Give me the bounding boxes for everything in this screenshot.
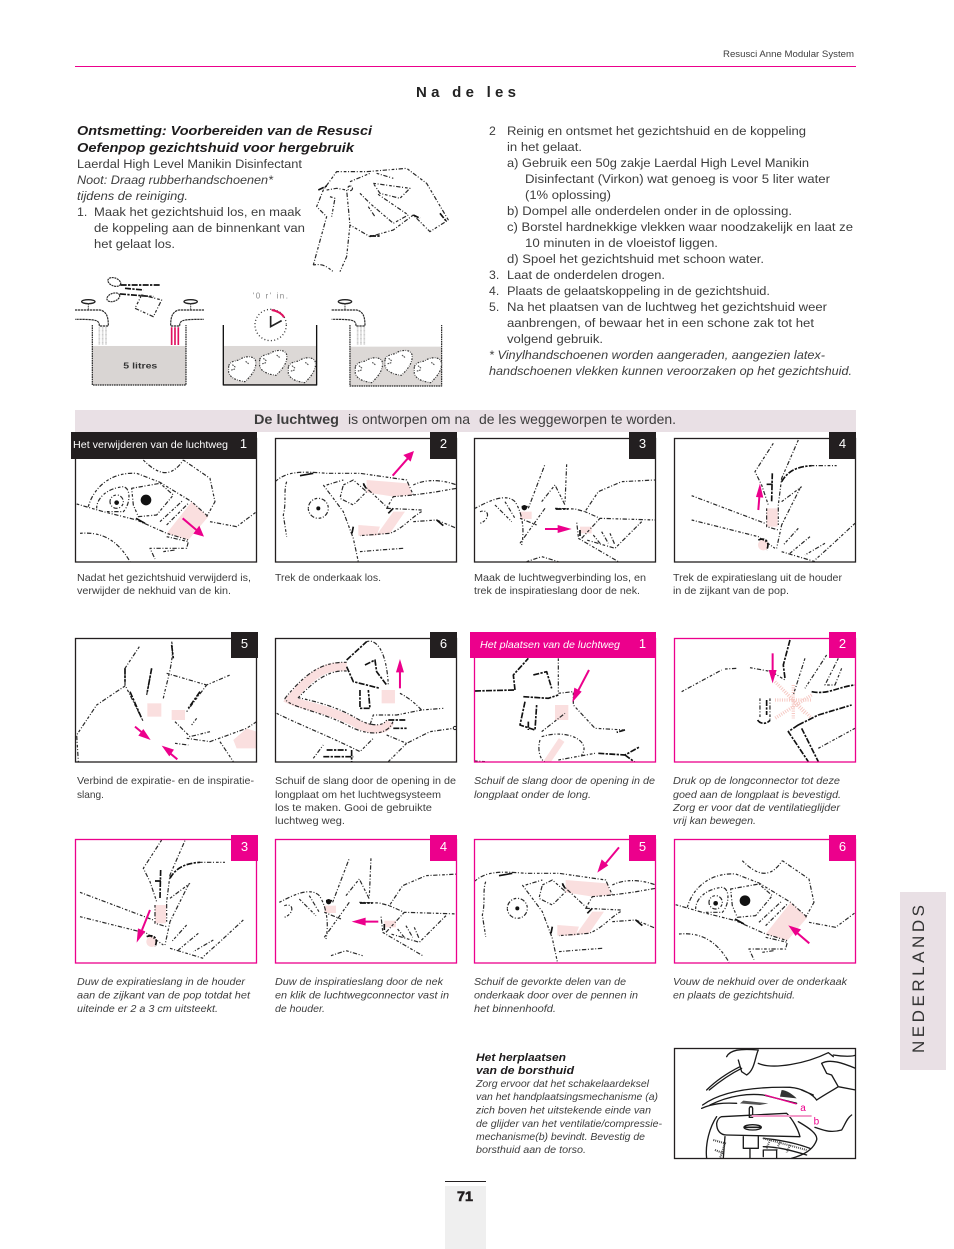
panel: placement step 6	[673, 835, 856, 1002]
text block: disinfection left column: Noot: Draag rubberhandschoenen*	[77, 173, 274, 187]
panel: removal step 5: slang.	[77, 790, 104, 801]
page number tab	[445, 1181, 486, 1249]
panel: placement step 6: 6	[839, 839, 846, 854]
panel: removal step 1: Nadat het gezichtshuid verwijderd is,	[77, 573, 251, 584]
text block: disinfection left column: 1.	[77, 205, 87, 219]
panel: removal step 2: 2	[440, 436, 447, 451]
text block: disinfection right column: 5.	[489, 300, 499, 314]
panel: placement step 5: het binnenhoofd.	[474, 1004, 556, 1015]
panel: removal step 4	[673, 432, 856, 597]
panel: placement step 6: en plaats de gezichtshuid.	[673, 990, 795, 1002]
illustration: chest skin mechanism	[674, 1048, 856, 1158]
illustration: basin with 5 litres: 5 litres	[123, 360, 158, 370]
panel: placement step 3: uiteinde er 2 a 3 cm uitsteekt.	[77, 1004, 218, 1015]
side tab: NEDERLANDS: NEDERLANDS	[909, 905, 928, 1053]
text block: disinfection right column: 2	[489, 124, 496, 138]
text block: replacing the chest skin: van het handplaatsingsmechanisme (a)	[476, 1092, 658, 1103]
text block: disinfection right column	[489, 124, 853, 378]
panel: placement step 1: longplaat onder de long.	[474, 790, 591, 801]
text block: disinfection right column: (1% oplossing)	[525, 188, 611, 202]
icon: hands holding face skin	[313, 168, 448, 272]
text block: replacing the chest skin: borsthuid aan de torso.	[476, 1145, 586, 1156]
panel: removal step 6: Schuif de slang door de opening in de	[275, 776, 456, 787]
illustration: chest skin mechanism: b	[814, 1117, 820, 1128]
text block: disinfection right column: * Vinylhandschoenen worden aangeraden, aangezien latex-	[489, 348, 825, 362]
section band: De luchtweg: de les weggeworpen te worden.	[479, 411, 676, 427]
panel: placement step 2: Druk op de longconnector tot deze	[673, 776, 840, 787]
text block: disinfection right column: aanbrengen, of bewaar het in een schone zak tot het	[507, 316, 815, 330]
text block: disinfection right column: handschoenen vlekken kunnen veroorzaken op het gezichtshuid.	[489, 364, 852, 378]
text block: replacing the chest skin: van de borsthuid	[476, 1065, 574, 1077]
text block: replacing the chest skin: mechanisme(b) bevindt. Bevestig de	[476, 1132, 645, 1143]
panel: removal step 1: 1	[240, 436, 247, 451]
panel: removal step 1: Het verwijderen van de luchtweg	[73, 440, 228, 451]
panel: removal step 6: los te maken. Gooi de gebruikte	[275, 803, 432, 814]
title: Na de les	[416, 84, 516, 101]
text block: disinfection left column: het gelaat los.	[94, 237, 175, 251]
text block: disinfection left column: Oefenpop gezichtshuid voor hergebruik	[77, 140, 355, 155]
panel: removal step 3	[474, 432, 656, 597]
panel: removal step 1	[71, 432, 257, 597]
panel: placement step 5: Schuif de gevorkte delen van de	[474, 977, 626, 988]
panel: placement step 5: 5	[639, 839, 646, 854]
panel: placement step 2: vrij kan bewegen.	[673, 816, 756, 827]
panel: placement step 1	[470, 632, 656, 801]
panel: placement step 6: Vouw de nekhuid over de onderkaak	[673, 977, 848, 988]
panel: placement step 5: onderkaak door over de pennen in	[474, 990, 638, 1002]
panel: placement step 4: de houder.	[275, 1004, 325, 1015]
text block: disinfection right column: a) Gebruik een 50g zakje Laerdal High Level Manikin	[507, 156, 809, 170]
text block: disinfection right column: Plaats de gelaatskoppeling in de gezichtshuid.	[507, 284, 770, 298]
text block: disinfection right column: volgend gebruik.	[507, 332, 603, 346]
panel: removal step 5	[76, 632, 258, 801]
panel: removal step 5: 5	[241, 636, 248, 651]
panel: placement step 4: 4	[440, 839, 447, 854]
text block: disinfection right column: Reinig en ontsmet het gezichtshuid en de koppeling	[507, 124, 806, 138]
panel: removal step 4: 4	[839, 436, 846, 451]
panel: removal step 1: verwijder de nekhuid van de kin.	[77, 586, 231, 597]
panel: removal step 6: luchtweg weg.	[275, 816, 345, 827]
panel: removal step 2	[275, 432, 457, 584]
text block: replacing the chest skin: Het herplaatsen	[476, 1052, 566, 1064]
panel: removal step 3: trek de inspiratieslang door de nek.	[474, 586, 640, 597]
panel: placement step 2: Zorg er voor dat de ventilatieglijder	[672, 803, 841, 814]
text block: disinfection left column: de koppeling aan de binnenkant van	[94, 221, 305, 235]
panel: placement step 2	[672, 632, 856, 827]
side tab: NEDERLANDS	[900, 892, 946, 1070]
panel: removal step 4: in de zijkant van de pop.	[673, 586, 789, 597]
panel: placement step 3: 3	[241, 839, 248, 854]
text block: disinfection left column: Laerdal High Level Manikin Disinfectant	[77, 157, 303, 171]
panel: placement step 3: Duw de expiratieslang in de houder	[77, 977, 246, 988]
illustration: rinsing basin	[332, 300, 442, 386]
text block: disinfection right column: Laat de onderdelen drogen.	[507, 268, 665, 282]
illustration: basin with clock: '0 r' in.	[253, 292, 288, 301]
panel: placement step 1: 1	[639, 636, 646, 651]
panel: placement step 1: Schuif de slang door de opening in de	[474, 776, 655, 787]
panel: placement step 4: en klik de luchtwegconnector vast in	[275, 990, 449, 1002]
text block: disinfection right column: b) Dompel alle onderdelen onder in de oplossing.	[507, 204, 792, 218]
panel: placement step 3: aan de zijkant van de pop totdat het	[77, 990, 251, 1002]
text block: replacing the chest skin: zich boven het uitstekende einde van	[475, 1106, 651, 1116]
panel: removal step 5: Verbind de expiratie- en de inspiratie-	[77, 776, 254, 787]
text block: disinfection left column: Ontsmetting: Voorbereiden van de Resusci	[77, 123, 372, 138]
text block: disinfection right column: 4.	[489, 284, 499, 298]
panel: removal step 6	[275, 632, 457, 827]
panel: placement step 2: 2	[839, 636, 846, 651]
text block: disinfection right column: c) Borstel hardnekkige vlekken waar noodzakelijk en laat ze	[507, 220, 853, 234]
panel: placement step 4: Duw de inspiratieslang door de nek	[275, 977, 444, 988]
page number tab: 71	[457, 1188, 473, 1204]
text block: disinfection right column: Na het plaatsen van de luchtweg het gezichtshuid weer	[507, 300, 827, 314]
panel: placement step 3	[76, 835, 258, 1015]
panel: placement step 2: goed aan de longplaat is bevestigd.	[673, 790, 841, 801]
text block: disinfection right column: Disinfectant (Virkon) wat genoeg is voor 5 liter water	[525, 172, 830, 186]
text block: replacing the chest skin	[475, 1052, 663, 1156]
panel: removal step 6: 6	[440, 636, 447, 651]
text block: disinfection left column	[77, 123, 372, 251]
text block: disinfection right column: in het gelaat.	[507, 140, 582, 154]
text block: disinfection right column: d) Spoel het gezichtshuid met schoon water.	[507, 252, 764, 266]
panel: removal step 4: Trek de expiratieslang uit de houder	[673, 573, 843, 584]
panel: removal step 2: Trek de onderkaak los.	[275, 573, 381, 584]
text block: replacing the chest skin: Zorg ervoor dat het schakelaardeksel	[475, 1079, 650, 1090]
illustration: basin with 5 litres	[75, 276, 204, 385]
section band: De luchtweg	[75, 410, 856, 432]
text block: disinfection left column: Maak het gezichtshuid los, en maak	[94, 205, 302, 219]
panel: placement step 1: Het plaatsen van de luchtweg	[480, 640, 620, 651]
text block: replacing the chest skin: de glijder van het ventilatie/compressie-	[476, 1119, 663, 1130]
panel: placement step 4	[275, 835, 459, 1015]
illustration: chest skin mechanism: a	[800, 1103, 806, 1114]
text block: disinfection right column: 10 minuten in de vloeistof liggen.	[525, 236, 718, 250]
illustration: basin with clock	[223, 292, 317, 385]
text block: disinfection left column: tijdens de reiniging.	[77, 189, 188, 203]
running header: Resusci Anne Modular System	[723, 49, 854, 59]
panel: removal step 3: 3	[639, 436, 646, 451]
section band: De luchtweg: is ontworpen om na	[348, 411, 470, 427]
panel: removal step 6: longplaat om het luchtwegsysteem	[275, 790, 441, 801]
header rule	[75, 66, 856, 67]
panel: removal step 3: Maak de luchtwegverbinding los, en	[474, 573, 646, 584]
section band: De luchtweg: De luchtweg	[254, 411, 339, 427]
panel: placement step 5	[474, 835, 656, 1015]
text block: disinfection right column: 3.	[489, 268, 499, 282]
